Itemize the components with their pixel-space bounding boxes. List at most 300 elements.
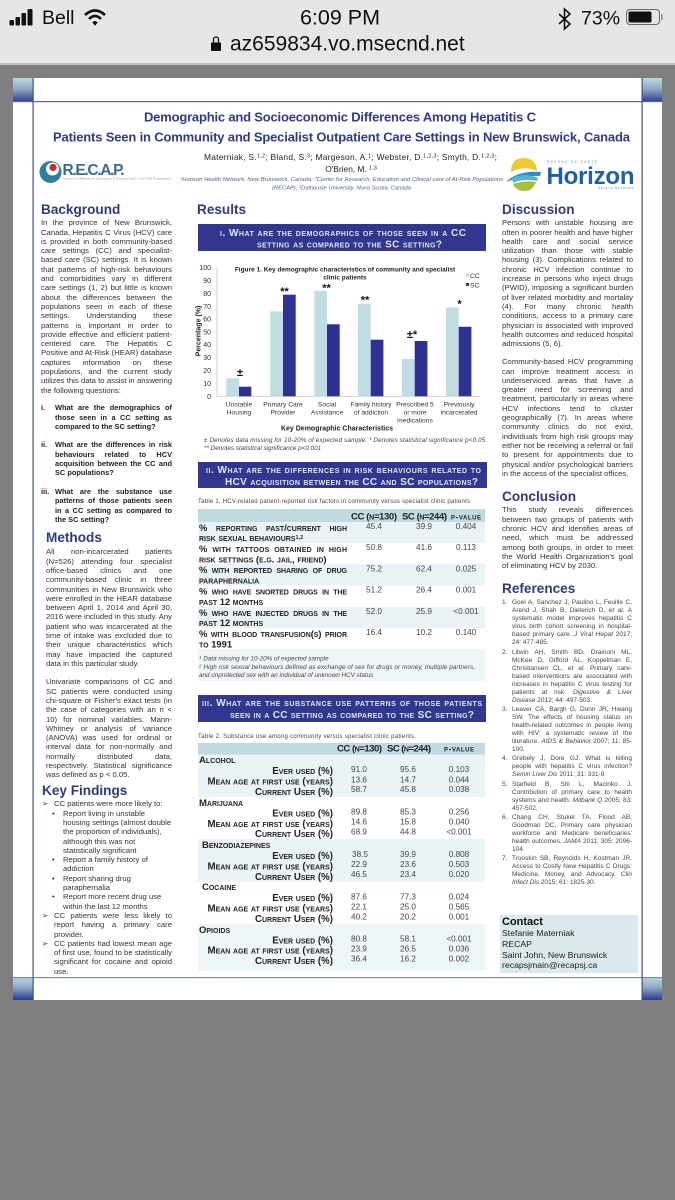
row: transfusion: 0.140 — [456, 628, 477, 637]
authors: ; Bland, S. — [265, 152, 307, 162]
section: cocaine: 77.3 — [400, 892, 416, 902]
banner iii — [198, 695, 486, 722]
text: background paragraph: In the province of New Brunswick, — [41, 218, 172, 227]
section: marijuana: Ever used (%) — [272, 808, 333, 820]
list: references: Arend J, Shah B, Dieterich D, et al. A — [512, 607, 632, 614]
section: cocaine: 22.1 — [351, 902, 367, 912]
heading: Results: Results — [197, 202, 246, 217]
section: marijuana: Mean age at first use (years) — [208, 819, 333, 830]
chart title: clinic patients — [323, 274, 367, 282]
icon: bluetooth — [559, 9, 570, 29]
list: key findings: • — [52, 809, 55, 818]
row: tattoos: 0.113 — [456, 543, 476, 552]
category labels: Housing — [227, 410, 252, 416]
list: references: Christiansen CL, et al. Primary care- — [512, 664, 632, 672]
authors: 1,2,3 — [481, 154, 494, 160]
row: tattoos: 50.8 — [366, 543, 382, 552]
section: benzodiazepines: 23.6 — [400, 860, 416, 869]
section: alcohol: 91.0 — [351, 765, 367, 774]
authors: ; Webster, D. — [371, 152, 423, 162]
row: tattoos: risk settings (e.g. jail, friend) — [199, 554, 327, 564]
question ii: What are the differences in risk — [55, 440, 172, 449]
section: marijuana: <0.001 — [446, 828, 472, 836]
affiliations: 2 — [313, 176, 317, 180]
list: key findings: ➢ — [42, 939, 48, 948]
text: background paragraph: that patterns of high-risk behaviours — [41, 265, 172, 274]
heading: Discussion: Discussion — [502, 202, 575, 217]
section: alcohol: 0.103 — [449, 765, 470, 774]
category labels: of addiction — [354, 410, 388, 416]
text: conclusion: of eliminating HCV by 2030. — [502, 561, 597, 570]
question iii: patterns of those patients seen — [55, 496, 172, 505]
section: alcohol: 0.044 — [449, 776, 470, 784]
text: methods paragraph 2: interval data for non-normally and — [46, 742, 172, 751]
category labels: incarcerated — [441, 410, 478, 416]
text: conclusion — [502, 505, 634, 570]
affiliations: 3 — [299, 184, 302, 189]
text: conclusion: This study reveals differences — [502, 505, 633, 514]
panel: contact: Contact — [502, 916, 543, 928]
list: references: increases in hepatitis C virus testing for — [512, 680, 632, 688]
row: transfusion: % with blood transfusion(s) prior — [199, 628, 347, 639]
row: paraphernalia: 75.2 — [366, 564, 382, 574]
list: references: Goel A, Sanchez J, Paulino L, Feuille C, — [512, 599, 632, 606]
text: discussion paragraph 2: greater need for screening and — [502, 385, 633, 394]
table 2 header: SC (n=244) — [387, 744, 431, 754]
question iii: What are the substance use — [55, 487, 172, 496]
list: key findings: Report more recent drug use — [63, 892, 161, 901]
question i — [41, 403, 172, 431]
affiliations: Horizon Health Network, New Brunswick, Canada; — [182, 177, 314, 183]
url: az659834.vo.msecnd.net — [230, 32, 465, 56]
y axis: 100 — [199, 265, 211, 272]
table 1 header — [351, 512, 481, 522]
y axis: 50 — [203, 330, 211, 336]
text: background paragraph: utilizes this data to assist in answering — [41, 376, 172, 385]
significance markers: ±* — [407, 329, 418, 341]
row: transfusion: to 1991 — [199, 638, 232, 650]
list: key findings: statistically significant — [63, 846, 136, 855]
list: key findings: CC patients were less likely to — [54, 911, 172, 920]
text: methods paragraph 1: data in this particular study. — [46, 659, 139, 668]
authors: 1,2 — [257, 154, 265, 160]
authors: 1 — [368, 154, 371, 160]
row: injected — [199, 607, 479, 628]
text: methods paragraph 1: All non-incarcerated patients — [46, 547, 172, 556]
question ii: acquisition between the CC and — [55, 459, 172, 468]
row: injected: <0.001 — [453, 607, 479, 616]
table 1 caption: Table 1. HCV-related patient-reported risk factors in community versus specialist clinic patients — [198, 499, 470, 505]
section: opioids: <0.001 — [446, 934, 472, 944]
text: methods paragraph 2: SC patients were conducted using — [46, 687, 172, 696]
list: key findings: ➢ — [42, 799, 48, 808]
list: key findings: paraphernalia — [63, 883, 110, 892]
section: benzodiazepines: 22.9 — [351, 860, 367, 869]
list: key findings: • — [52, 874, 55, 883]
text: discussion paragraph 2: Community-based HCV programming — [502, 357, 633, 366]
y axis: 0 — [207, 394, 211, 401]
logo: RECAP: Centre for Research, Education & Clinical Care of At-Risk Populations — [63, 176, 171, 180]
list: references: Chang CH, Stukel TA, Flood AB, — [512, 814, 632, 821]
text: background paragraph: patterns is important in order to — [41, 321, 172, 330]
row: paraphernalia: 0.025 — [456, 564, 477, 574]
table 1 footnotes: 1 — [199, 655, 202, 660]
section: alcohol: 58.7 — [351, 785, 367, 794]
significance markers: ** — [361, 294, 370, 306]
bar chart: figure 1 — [196, 265, 480, 432]
text: background paragraph: and comorbidities vary in different — [41, 274, 172, 283]
row: tattoos — [199, 543, 476, 564]
panel: contact: Saint John, New Brunswick — [502, 950, 607, 960]
list: key findings: Report living in unstable — [63, 809, 145, 818]
authors: ; — [495, 152, 497, 162]
list: references: Litwin AH, Smith BD, Drainoni ML, — [512, 648, 632, 656]
y axis: Percentage (%) — [196, 306, 202, 356]
text: background paragraph: Canada, Hepatitis C Virus (HCV) care — [41, 228, 172, 237]
category labels: Family history — [350, 402, 392, 408]
list: references: systematic model improves hepatitis C — [512, 615, 632, 622]
question iii — [41, 487, 172, 524]
authors: Materniak, S. — [204, 152, 257, 162]
browser status bar — [0, 0, 675, 65]
table 2 header: CC (n=130) — [337, 744, 382, 754]
list: references: based primary care. J Viral Hepat 2017; — [512, 631, 632, 638]
table 1 footnotes: High risk sexual behaviours defined as exchange of sex for drugs or money, multiple partners, — [202, 664, 475, 671]
text: discussion paragraph 2: underserviced areas that have a — [502, 376, 633, 385]
list: key findings: ➢ — [42, 911, 48, 920]
authors — [204, 152, 497, 174]
table 1 footnotes — [198, 655, 475, 679]
row: transfusion — [199, 628, 477, 650]
list: key findings: provider. — [54, 930, 83, 939]
legend: SC — [470, 282, 480, 290]
table 1 footnotes: and unprotected sex with an individual of unknown HCV status — [199, 672, 374, 679]
y axis — [196, 265, 480, 401]
text: discussion paragraph 2: either not be receiving a referral or fail — [502, 441, 633, 450]
text: discussion paragraph 2: in the access of the specialist offices. — [502, 469, 628, 478]
text: methods paragraph 2: the case of categories with an n < — [46, 705, 172, 714]
text: background paragraph: captures information on these — [41, 358, 172, 367]
y axis: 80 — [203, 291, 211, 298]
category labels: Primary Care — [263, 402, 303, 408]
text: discussion paragraph 1: (4). For many chronic health — [502, 302, 633, 311]
text: background paragraph: populations, and the current study — [41, 367, 172, 376]
text: discussion paragraph 1: Persons with unstable housing are — [502, 218, 633, 227]
legend — [466, 273, 480, 290]
list: references: workforce and Medicare beneficiaries' — [512, 830, 632, 837]
text: background paragraph: provide effective and efficient patient- — [41, 330, 172, 339]
row: sexual behaviours: 0.404 — [456, 522, 477, 531]
section: cocaine — [202, 882, 470, 925]
list: references: 4. — [502, 755, 507, 762]
text: background paragraph: the following questions: — [41, 386, 121, 395]
row: transfusion: 10.2 — [416, 628, 432, 637]
row: paraphernalia — [199, 564, 477, 586]
section: opioids: Mean age at first use (years) — [208, 946, 333, 956]
row: paraphernalia: paraphernalia — [199, 574, 259, 586]
question iii: iii. — [41, 487, 49, 496]
text: discussion paragraph 1: physician is associated with improved — [502, 321, 633, 330]
clock: 6:09 PM — [300, 6, 380, 30]
text: discussion paragraph 1: health outcomes and reduced hospital — [502, 330, 633, 339]
section: alcohol: 45.8 — [400, 785, 416, 794]
text: discussion paragraph 2: to present for appointments due to — [502, 450, 633, 459]
table 1 header: p-value — [451, 512, 481, 522]
row: sexual behaviours: risk sexual behaviours — [199, 532, 295, 543]
authors: ; Margeson, A. — [310, 152, 368, 162]
list: references — [502, 599, 632, 886]
banner ii: HCV acquisition between the CC and SC populations? — [225, 477, 478, 488]
section: benzodiazepines: 39.9 — [400, 850, 416, 859]
text: methods paragraph 2: (ANOVA) was used for ordinal or — [46, 733, 172, 742]
section: alcohol: Ever used (%) — [272, 766, 333, 777]
list: key findings: the proportion of individuals), — [63, 827, 162, 836]
question ii: behaviours related to HCV — [55, 450, 172, 459]
text: background paragraph: about the differences between the — [41, 293, 172, 302]
text: conclusion: among both groups, in order to meet — [502, 543, 633, 552]
section: cocaine: 87.6 — [351, 892, 367, 902]
row: snorted: 26.4 — [416, 586, 432, 594]
section: benzodiazepines: Benzodiazepines — [202, 840, 271, 851]
list: key findings: CC patients had lowest mean age — [54, 939, 172, 948]
banner i — [198, 224, 486, 251]
text: background paragraph: settings. Understanding these — [41, 311, 172, 320]
y axis: 40 — [203, 342, 211, 349]
heading: Conclusion: Conclusion — [502, 489, 576, 504]
list: key findings: Report a family history of — [63, 855, 148, 864]
section: marijuana: 15.8 — [400, 818, 416, 826]
list: key findings — [42, 799, 172, 976]
text: methods paragraph 1: (N=526) attending four specialist — [46, 557, 172, 566]
category labels: or more — [403, 410, 427, 416]
text: methods paragraph 2: Whitney or analysis of variance — [46, 724, 172, 733]
text: discussion paragraph 1: admissions (5, 6). — [502, 339, 563, 348]
question ii — [41, 440, 172, 477]
banner i: i. What are the demographics of those seen in a CC — [220, 228, 466, 239]
list: key findings: use. — [54, 967, 69, 976]
question ii: SC populations? — [55, 468, 114, 477]
title: Patients Seen in Community and Specialist Outpatient Care Settings in New Brunswick, Canada — [53, 130, 631, 144]
text: methods paragraph 2: respectively. Statistical significance — [46, 761, 172, 770]
section: opioids: 0.002 — [449, 954, 470, 964]
list: references: 100. — [512, 746, 525, 753]
y axis: 60 — [203, 316, 211, 324]
list: references: Infect Dis 2015; 61: 1825-30. — [512, 879, 595, 886]
category labels — [226, 402, 478, 424]
y axis: 90 — [203, 278, 211, 285]
list: key findings: • — [52, 855, 55, 864]
significance markers — [237, 282, 462, 379]
significance markers: ** — [322, 282, 331, 294]
section: opioids: 16.2 — [400, 954, 416, 964]
section: cocaine: 20.2 — [400, 912, 416, 922]
text: methods paragraph 1: communities in New Brunswick who — [46, 585, 172, 594]
text: background paragraph: care settings (CC) and specialist- — [41, 246, 172, 255]
list: key findings: addiction — [63, 864, 94, 873]
heading: Methods: Methods — [46, 530, 102, 545]
list: key findings: of first use, found to be statistically — [54, 948, 172, 957]
text: methods paragraph 2: Univariate comparisons of CC and — [46, 677, 172, 686]
section: opioids: 58.1 — [400, 934, 416, 944]
section: cocaine: Mean age at first use (years) — [208, 904, 333, 914]
category labels: Assistance — [311, 410, 343, 416]
list: references: 3. — [502, 706, 507, 713]
question iii: in a CC setting as compared to — [55, 506, 172, 515]
list: references: Goodman DC. Primary care physician — [512, 822, 632, 829]
text: discussion paragraph 1: chronic HCV infection continue to — [502, 265, 633, 274]
section: opioids: 23.9 — [351, 944, 367, 954]
text: discussion paragraph 1: (PWID), imposing a significant burden — [502, 283, 633, 292]
text: methods paragraph 1: 2016 were included in this study. Any — [46, 612, 172, 621]
affiliations — [180, 176, 503, 192]
list: references: health-related outcomes in people living — [512, 722, 632, 729]
section: alcohol: Mean age at first use (years) — [208, 776, 333, 788]
chart footnotes: ** Denotes statistical significance p<0.001 — [204, 445, 321, 452]
list: key findings: report having a primary care — [54, 920, 172, 929]
question i: those seen in a CC setting as — [55, 413, 172, 422]
y axis: 10 — [203, 381, 211, 388]
section: benzodiazepines: Mean age at first use (years) — [208, 862, 333, 872]
authors: 1,2,3 — [423, 154, 436, 160]
title: Demographic and Socioeconomic Differences Among Hepatitis C — [144, 110, 537, 124]
icon: wifi — [85, 10, 105, 25]
row: sexual behaviours: 1,2 — [295, 535, 303, 541]
table 2 header: p-value — [444, 744, 474, 754]
section: marijuana — [199, 798, 472, 840]
text: methods paragraph 2 — [46, 677, 172, 779]
list: references: Medicine, Money, and Advocacy. Clin — [512, 871, 632, 878]
list: references: McKee D, Gifford AL, Koppelman E, — [512, 656, 632, 664]
list: references: patients at risk. Digestive & Liver — [512, 688, 632, 696]
chart footnotes: ± Denotes data missing for 10-20% of expected sample. * Denotes statistical significance p<0.05. — [204, 437, 487, 444]
x axis title: Key Demographic Characteristics — [281, 426, 393, 432]
text: methods paragraph 2: normally distributed data, — [46, 752, 172, 761]
heading: References: References — [502, 581, 575, 596]
list: references: people with hepatitis C virus infection? — [512, 763, 632, 770]
text: methods paragraph 1: between April 1, 2014 and April 30, — [46, 603, 172, 612]
section: opioids: Opioids — [199, 925, 230, 936]
section: opioids: 0.036 — [449, 944, 470, 954]
list: references: Disease 2012; 44: 497-503. — [512, 696, 592, 704]
section: marijuana: 0.256 — [449, 808, 470, 816]
text: methods paragraph 1 — [46, 547, 172, 668]
section: benzodiazepines: Ever used (%) — [272, 851, 333, 862]
banner iii: iii. What are the substance use patterns of those patients — [202, 698, 482, 709]
chart title: Figure 1. Key demographic characteristics of community and specialist — [235, 266, 456, 274]
text: background paragraph: based care (SC) settings. It is known — [41, 255, 172, 264]
text: discussion paragraph 1: housing (3). Complications related to — [502, 255, 633, 264]
bars: CC — [226, 291, 459, 396]
text: methods paragraph 2: chi-square or Fisher's exact tests (in — [46, 696, 172, 705]
list: references: 7. — [502, 855, 507, 862]
panel: contact: recapsjmain@recapsj.ca — [502, 960, 597, 970]
logo: Horizon: RÉSEAU DE SANTÉ — [547, 159, 597, 164]
affiliations: Center for Research, Education and Clinical care of At-Risk Populations — [317, 177, 503, 183]
row: injected: 52.0 — [366, 607, 382, 616]
text: conclusion: chronic HCV and identifies areas of — [502, 524, 633, 533]
section: marijuana: Marijuana — [199, 798, 243, 809]
list: references: 5. — [502, 780, 507, 788]
text: discussion paragraph 1: often in poorer health and have higher — [502, 228, 633, 237]
text: methods paragraph 1: may have impacted the captured — [46, 650, 172, 659]
row: sexual behaviours: 39.9 — [416, 522, 432, 531]
list: references: 457-502. — [512, 804, 538, 812]
list: references: Access to Costly New Hepatitis C Drugs: — [512, 863, 632, 870]
section: benzodiazepines: 23.4 — [400, 870, 416, 879]
section: alcohol: 95.6 — [400, 765, 416, 774]
section: benzodiazepines: 0.808 — [449, 850, 470, 859]
heading: Key Findings: Key Findings — [42, 783, 127, 798]
table 1 header: CC (n=130) — [351, 512, 397, 522]
heading: Background: Background — [41, 202, 120, 217]
text: background paragraph: centered care. The Hepatitis C — [41, 339, 172, 348]
affiliations: (RECAP); — [272, 186, 297, 192]
text: discussion paragraph 2: individuals from high risk groups may — [502, 432, 633, 441]
list: references: 1. — [502, 599, 507, 606]
row: injected: past 12 months — [199, 617, 263, 628]
text: discussion paragraph 2: HCV infections tend to cluster — [502, 404, 633, 413]
section: benzodiazepines: Current User (%) — [255, 872, 333, 883]
list: key findings: CC patients were more likely to: — [54, 799, 163, 808]
row: paraphernalia: % with reported sharing of drug — [199, 564, 348, 575]
text: discussion paragraph 1: increase in persons who inject drugs — [502, 274, 633, 283]
chart title — [235, 266, 456, 282]
significance markers: ± — [237, 367, 243, 379]
row: snorted: past 12 months — [199, 596, 263, 607]
list: references: systems and health. Milbank Q 2005; 83: — [512, 796, 632, 804]
row: snorted: 0.001 — [456, 586, 477, 594]
text: methods paragraph 1: patient who was incarcerated at the — [46, 622, 172, 631]
section: cocaine: 25.0 — [400, 902, 416, 912]
row: sexual behaviours: % reporting past/current high — [199, 522, 347, 533]
significance markers: * — [457, 298, 462, 310]
section: alcohol: 0.038 — [449, 785, 470, 794]
text: conclusion: between two groups of patients with — [502, 515, 633, 524]
section: benzodiazepines: 46.5 — [351, 870, 367, 879]
section: alcohol: Alcohol — [199, 755, 236, 766]
table 1 header: SC (n=244) — [402, 512, 447, 522]
section: cocaine: 0.565 — [449, 902, 470, 912]
text: background paragraph: care settings (1, 2) but little is known — [41, 283, 172, 292]
question i: i. — [41, 403, 45, 412]
section: alcohol: 13.6 — [351, 776, 367, 784]
y axis: 70 — [203, 304, 211, 311]
row: snorted — [199, 586, 477, 607]
authors: 3 — [307, 154, 310, 160]
row: transfusion: 16.4 — [366, 628, 382, 637]
affiliations: 1 — [180, 176, 182, 180]
section: cocaine: 0.001 — [449, 912, 470, 922]
section: cocaine: Cocaine — [202, 882, 236, 893]
table 2 caption: Table 2. Substance use among community versus specialist clinic patients. — [198, 734, 416, 740]
table 1 footnotes: Data missing for 10-20% of expected sample — [202, 656, 329, 662]
text: methods paragraph 1: community-based clinic in three — [46, 575, 172, 584]
list: key findings: significant for cocaine and opioid — [54, 957, 172, 966]
banner iii: seen in a CC setting as compared to the SC setting? — [230, 710, 474, 721]
text: discussion paragraph 2: can improve treatment access in — [502, 367, 633, 376]
section: benzodiazepines: 0.020 — [449, 870, 470, 879]
section: opioids: 26.5 — [400, 944, 416, 954]
list: references: virus birth cohort screening in hospital- — [512, 623, 632, 630]
row: sexual behaviours: 45.4 — [366, 522, 382, 531]
logo: Horizon — [506, 158, 634, 191]
section: marijuana: 68.9 — [351, 828, 367, 836]
y axis: 20 — [203, 368, 211, 375]
row: paraphernalia: 62.4 — [416, 564, 432, 574]
text: methods paragraph 2: 10) for nominal variables. Mann- — [46, 715, 172, 724]
section: cocaine: Ever used (%) — [272, 893, 333, 904]
table 2 — [198, 743, 485, 971]
